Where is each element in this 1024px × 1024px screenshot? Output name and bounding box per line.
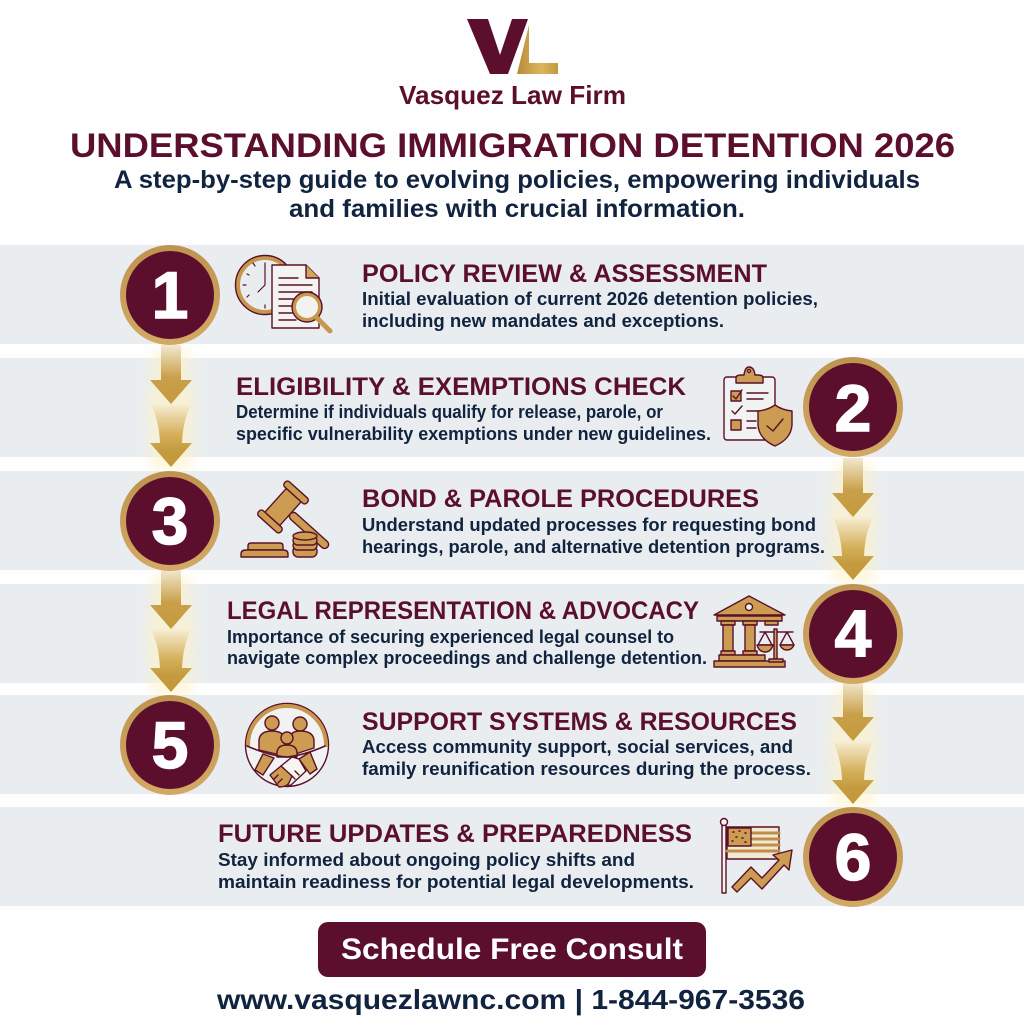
step 4 text: LEGAL REPRESENTATION & ADVOCACY [227, 597, 699, 625]
step 6 icon: flag and rising arrow [720, 818, 792, 893]
step 5 text: SUPPORT SYSTEMS & RESOURCES [362, 708, 797, 736]
step 3 badge [123, 474, 217, 568]
logo mark V [467, 19, 528, 74]
step 3 text: hearings, parole, and alternative detention programs. [362, 537, 825, 557]
step 4 badge [806, 587, 900, 681]
step 6 text: Stay informed about ongoing policy shifts and [218, 850, 635, 870]
logo mark L [517, 25, 558, 74]
arrows: step 4 to 6 [829, 682, 877, 807]
subtitle: A step-by-step guide to evolving policies, empowering individuals [114, 166, 920, 194]
step 5 icon: family and handshake [246, 704, 328, 787]
subtitle: and families with crucial information. [289, 195, 745, 223]
arrows: step 2 to 4 [829, 458, 877, 583]
step 4 text: navigate complex proceedings and challenge detention. [227, 648, 707, 668]
step 2 text: specific vulnerability exemptions under new guidelines. [236, 424, 711, 444]
arrows: step 3 to 5 [147, 570, 195, 695]
step 5 text: Access community support, social services, and [362, 737, 793, 757]
step 6 badge: 6 [835, 820, 871, 894]
step 3 icon: gavel and coins [241, 480, 343, 564]
step 6 badge [806, 810, 900, 904]
step 6 text: maintain readiness for potential legal developments. [218, 872, 694, 892]
step 3 text [362, 485, 825, 557]
step 4 badge: 4 [835, 596, 872, 670]
step 4 text: Importance of securing experienced legal counsel to [227, 627, 674, 647]
subtitle [114, 166, 920, 223]
step 2 icon: clipboard and shield [724, 367, 792, 446]
step 1 badge: 1 [152, 258, 188, 332]
step 1 text: POLICY REVIEW & ASSESSMENT [362, 260, 767, 288]
contact line: www.vasquezlawnc.com | 1-844-967-3536 [216, 984, 805, 1015]
logo [399, 19, 626, 110]
step 2 badge [806, 360, 900, 454]
arrows: step 1 to 3 [147, 345, 195, 470]
step 2 text: ELIGIBILITY & EXEMPTIONS CHECK [236, 373, 686, 401]
step bands [0, 245, 1024, 906]
step 1 badge [123, 248, 217, 342]
call to action button: Schedule Free Consult [341, 933, 683, 966]
firm name: Vasquez Law Firm [399, 80, 626, 110]
step 1 text: including new mandates and exceptions. [362, 311, 724, 331]
step 5 badge: 5 [152, 708, 188, 782]
step 4 text [227, 597, 707, 668]
step 2 text [236, 373, 711, 444]
step 3 badge: 3 [152, 484, 188, 558]
step 6 text: FUTURE UPDATES & PREPAREDNESS [218, 820, 692, 848]
step 3 text: Understand updated processes for requesting bond [362, 515, 816, 535]
step 4 icon: courthouse and scales [714, 596, 794, 667]
call to action button [318, 922, 706, 977]
step 5 text [362, 708, 811, 779]
step 1 text [362, 260, 818, 331]
step 6 text [218, 820, 694, 892]
step 1 icon: clock and document search [236, 256, 330, 331]
step 3 text: BOND & PAROLE PROCEDURES [362, 485, 759, 513]
step 2 badge: 2 [835, 371, 871, 445]
step 5 badge [123, 698, 217, 792]
step 5 text: family reunification resources during the process. [362, 759, 811, 779]
title: UNDERSTANDING IMMIGRATION DETENTION 2026 [70, 127, 955, 165]
step 1 text: Initial evaluation of current 2026 detention policies, [362, 289, 818, 309]
step 2 text: Determine if individuals qualify for release, parole, or [236, 402, 663, 422]
